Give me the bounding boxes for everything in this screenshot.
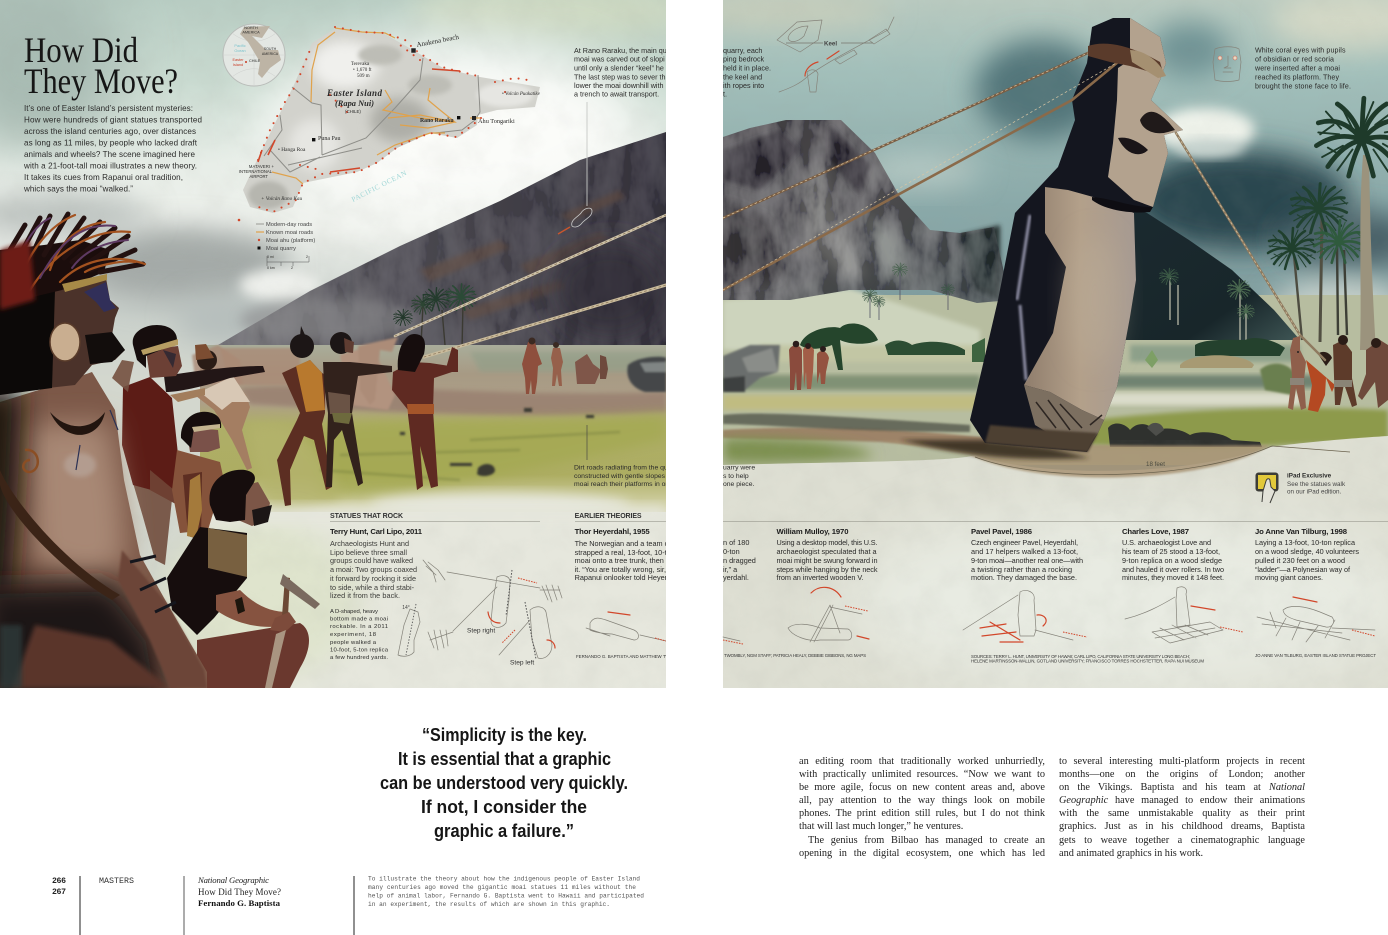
locator globe: SOUTH xyxy=(264,47,277,51)
theory: Charles Love: Charles Love, 1987 xyxy=(1122,527,1189,536)
diagram: rocking moai profile: 14° xyxy=(402,605,410,611)
section: statues that rock: a few hundred yards. xyxy=(330,655,388,661)
map of Easter Island: AIRPORT xyxy=(249,174,268,179)
map of Easter Island: 509 m xyxy=(357,74,370,79)
section: earlier theories, Thor Heyerdahl, left half xyxy=(575,513,671,659)
pull quote: It is essential that a graphic xyxy=(398,748,611,769)
dark mountain xyxy=(1126,212,1298,340)
young woman with tool xyxy=(172,412,226,540)
article text column one xyxy=(799,756,1045,859)
footer: section label xyxy=(99,876,184,935)
footer: credit: National Geographic xyxy=(197,875,269,885)
boulders at left xyxy=(723,345,780,392)
map of Easter Island: Terevaka xyxy=(351,62,370,67)
sky xyxy=(0,0,666,654)
heading: How Did They Move?: How Did xyxy=(24,30,138,70)
footer: section label: MASTERS xyxy=(99,877,134,886)
theory: Pavel Pavel: Pavel Pavel, 1986 xyxy=(971,527,1032,536)
map of Easter Island: Rano Raraku xyxy=(420,118,454,124)
heading: How Did They Move? xyxy=(24,30,178,101)
footer: credit xyxy=(197,875,354,935)
section: statues that rock: a moai: Two groups coaxed xyxy=(330,565,417,574)
map of Easter Island: Puna Pau xyxy=(318,136,340,142)
map of Easter Island: (CHILE) xyxy=(345,109,361,114)
article text column one: opening in the digital ecosystem, one which has led xyxy=(799,848,1045,859)
section: statues that rock: groups could have walked xyxy=(330,556,413,565)
intro paragraph: It takes its cues from Rapanui oral tradition, xyxy=(24,173,183,182)
moai statue xyxy=(970,18,1183,452)
section: statues that rock: rockable. In a 2011 xyxy=(330,624,388,630)
mountain: Rano Raraku xyxy=(218,132,666,345)
footer: credit: Fernando G. Baptista xyxy=(198,898,281,908)
section: statues that rock: bottom made a moai xyxy=(330,616,388,622)
footer: caption: many centuries ago moved the gigantic moai statues 11 miles without the xyxy=(368,884,636,891)
theory: Pavel Pavel: motion. They damaged the base. xyxy=(971,573,1077,582)
footer: caption: To illustrate the theory about how the indigenous people of Easter Island xyxy=(368,876,640,882)
thatched house xyxy=(1180,355,1254,368)
diagram: keel and quarrying steps: Keel xyxy=(824,40,837,48)
left page illustration: moai hauling crew xyxy=(0,0,710,700)
callout: Rano Raraku quarry, left half xyxy=(574,46,667,98)
locator globe: AMERICA xyxy=(242,30,260,34)
section: earlier theories, Thor Heyerdahl, left half: FERNANDO G. BAPTISTA AND MATTHEW TW xyxy=(576,654,671,659)
map of Easter Island: + Volcán Rano Kau xyxy=(261,196,303,202)
callout: Rano Raraku quarry, left half: a trench to await transport. xyxy=(574,90,659,98)
section: statues that rock: STATUES THAT ROCK xyxy=(330,513,403,520)
callout: coral eyes with face icon xyxy=(1213,46,1351,90)
intro paragraph: as long as 11 miles, by people who lacked draft xyxy=(24,138,198,148)
feathers xyxy=(0,240,110,305)
ropes left page xyxy=(395,215,666,357)
callout: Rano Raraku quarry, right half: ith ropes into xyxy=(723,81,764,90)
callout: Rano Raraku quarry, left half: lower the moai downhill with xyxy=(574,81,664,90)
theory: Jo Anne Van Tilburg: moving giant canoes. xyxy=(1255,573,1323,582)
callout: Rano Raraku quarry, right half: quarry, each xyxy=(723,46,762,55)
modern roads xyxy=(264,58,480,172)
pull quote: “Simplicity is the key. xyxy=(422,724,587,745)
right page illustration: the giant moai xyxy=(670,0,1388,690)
callout: iPad exclusive: See the statues walk xyxy=(1287,481,1346,488)
theory: Jo Anne Van Tilburg: Laying a 13-foot, 10-ton replica xyxy=(1255,538,1356,547)
chief in feather headdress xyxy=(0,214,207,700)
article text column one: be more agile, focus on new content areas and, above xyxy=(799,782,1045,793)
callout: dirt roads, left half: moai reach their platforms in one xyxy=(574,481,673,488)
map legend: 2 xyxy=(306,255,308,259)
map markers and labels xyxy=(411,48,416,53)
theory: Pavel Pavel: SOURCES: TERRY L. HUNT, UNIVERSITY OF HAWAII; CARL LIPO, CALIFORNIA STATE UNIVERSITY LONG BEACH; xyxy=(971,654,1190,659)
article text column one: The genius from Bilbao has managed to create an xyxy=(808,835,1045,846)
palm trees on left page xyxy=(393,284,476,350)
theory: Pavel Pavel: and 17 helpers walked a 13-foot, xyxy=(971,547,1078,556)
article text column two: months—one on the origins of London; another xyxy=(1059,769,1305,780)
section: earlier theories, Thor Heyerdahl, left half: it. “You are totally wrong, sir, xyxy=(575,565,666,574)
dirt circle around moai base: 18 feet xyxy=(1146,461,1165,468)
callout: Rano Raraku quarry, right half: the keel and xyxy=(723,72,762,82)
map of Easter Island: Ahu Tongariki xyxy=(478,118,515,125)
section: statues that rock: 10-foot, 5-ton replica xyxy=(330,648,389,654)
locator globe: Pacific xyxy=(234,44,246,48)
theory: Pavel Pavel: 9-ton moai—another real one—with xyxy=(971,556,1083,565)
article text column two xyxy=(1059,756,1305,859)
map of Easter Island: Anakena beach xyxy=(416,33,460,49)
diagram: walking moai step right and step left: Step left xyxy=(510,660,534,666)
distant crowd xyxy=(192,337,398,410)
theory: William Mulloy xyxy=(776,527,878,642)
footer: caption: in an experiment, the results of which are shown in this graphic. xyxy=(368,901,610,908)
theory: Jo Anne Van Tilburg: Jo Anne Van Tilburg, 1998 xyxy=(1255,527,1348,536)
hauling man in dark paint xyxy=(323,332,392,487)
locator globe: NORTH xyxy=(244,26,258,30)
callout: Rano Raraku quarry, left half: At Rano Raraku, the main qu xyxy=(574,46,667,55)
intro paragraph: It’s one of Easter Island’s persistent mysteries: xyxy=(24,104,193,113)
callout: dirt roads, left half: constructed with gentle slopes to xyxy=(574,473,673,480)
theory: William Mulloy: Using a desktop model, this U.S. xyxy=(776,538,878,547)
callout: iPad exclusive: on our iPad edition. xyxy=(1287,488,1342,496)
far figures at right xyxy=(522,338,608,394)
intro paragraph: animals and wheels? The scene imagined here xyxy=(24,150,195,159)
section: earlier theories, Thor Heyerdahl, left half: moai onto a tree trunk, then d xyxy=(575,556,670,565)
theory: Jo Anne Van Tilburg: JO ANNE VAN TILBURG, EASTER ISLAND STATUE PROJECT xyxy=(1255,653,1376,658)
map of Easter Island: • Volcán Puakatike xyxy=(502,92,541,97)
section: earlier theories, Thor Heyerdahl, left half: strapped a real, 13-foot, 10-t xyxy=(575,548,667,557)
theory: Charles Love: U.S. archaeologist Love and xyxy=(1122,538,1211,547)
theory: Jo Anne Van Tilburg: “ladder”—a Polynesian way of xyxy=(1255,565,1351,574)
map legend: Known moai roads xyxy=(266,230,313,236)
section: statues that rock: experiment, 18 xyxy=(330,632,377,638)
theory: William Mulloy: William Mulloy, 1970 xyxy=(776,527,848,536)
theory: Jo Anne Van Tilburg: pulled it 230 feet on a wood xyxy=(1255,556,1345,565)
section: statues that rock xyxy=(330,513,540,661)
map of Easter Island: • Hanga Roa xyxy=(278,147,306,153)
callout: dirt roads, left half xyxy=(574,425,673,488)
map legend: Modern-day roads xyxy=(266,222,312,228)
ground xyxy=(200,345,666,525)
known moai roads xyxy=(272,28,481,184)
footer: page numbers xyxy=(52,876,80,935)
callout: coral eyes with face icon: brought the stone face to life. xyxy=(1255,82,1351,90)
boulders xyxy=(400,357,666,476)
callout: Rano Raraku quarry, left half: until only a slender “keel” he xyxy=(574,64,664,72)
map of Easter Island: MATAVERI + xyxy=(249,164,274,169)
theory: William Mulloy: archaeologist speculated that a xyxy=(776,547,877,556)
crew pulling the right rope xyxy=(1288,335,1388,412)
callout: Rano Raraku quarry, right half: t. xyxy=(723,90,727,98)
diagram: walking moai step right and step left: Step right xyxy=(467,628,495,634)
Thor Heyerdahl text, right half: ir,” a xyxy=(723,565,738,574)
section: statues that rock: Archaeologists Hunt and xyxy=(330,539,409,548)
standing man in cream cloth xyxy=(195,344,252,470)
article text column two: on the Vikings. Baptista and his team at National xyxy=(1059,782,1305,793)
theory: Pavel Pavel: a twisting rather than a rocking xyxy=(971,565,1072,574)
moai ahu dots xyxy=(253,27,528,212)
callout: dirt roads, right half: one piece. xyxy=(723,481,754,488)
footer: credit: How Did They Move? xyxy=(198,887,281,897)
Thor Heyerdahl text, right half: n of 180 xyxy=(723,538,749,547)
statue silhouette xyxy=(970,18,1183,452)
heading: How Did They Move?: They Move? xyxy=(24,61,178,101)
earring xyxy=(50,323,80,361)
map legend: 0 km xyxy=(267,266,275,270)
section: statues that rock: A D-shaped, heavy xyxy=(330,609,378,615)
section: statues that rock: people walked a xyxy=(330,640,377,646)
intro paragraph: which says the moai “walked.” xyxy=(23,184,133,194)
map legend: Moai ahu (platform) xyxy=(266,238,315,244)
divider across earlier theories xyxy=(723,520,1388,522)
pull quote: can be understood very quickly. xyxy=(380,772,628,793)
callout: coral eyes with face icon: White coral eyes with pupils xyxy=(1255,46,1346,54)
theory: Charles Love: and hauled it over rollers. In two xyxy=(1122,565,1224,574)
section: earlier theories, Thor Heyerdahl, left half: Thor Heyerdahl, 1955 xyxy=(575,527,650,536)
map legend: Moai quarry xyxy=(266,246,296,252)
keel outline and callout line on the mountain xyxy=(558,102,592,234)
theory: Charles Love: minutes, they moved it 148 feet. xyxy=(1122,573,1224,582)
Thor Heyerdahl text, right half: n dragged xyxy=(723,556,756,565)
callout: iPad exclusive: iPad Exclusive xyxy=(1287,472,1332,480)
map legend: 2 xyxy=(291,266,293,270)
map of Easter Island: Easter Island xyxy=(326,88,382,98)
face xyxy=(1108,18,1183,207)
footer: caption: help of animal labor, Fernando G. Baptista went to Hawaii and participated xyxy=(368,892,644,900)
pull quote: graphic a failure.” xyxy=(434,820,574,841)
theory: William Mulloy: from an inverted wooden V. xyxy=(776,573,864,582)
article text column one: all, pay attention to the way things look on mobile xyxy=(799,795,1045,806)
distant onlookers xyxy=(789,341,829,390)
theory: Jo Anne Van Tilburg: on a wood sledge, 40 volunteers xyxy=(1255,547,1359,556)
map of Easter Island xyxy=(238,27,541,221)
man pointing xyxy=(112,325,265,565)
section: earlier theories, Thor Heyerdahl, left half: Rapanui onlooker told Heyer xyxy=(575,573,668,582)
map of Easter Island: PACIFIC OCEAN xyxy=(350,169,409,204)
callout: dirt roads, right half: uarry were xyxy=(723,464,755,472)
section: statues that rock: it forward by rocking it side xyxy=(330,574,416,583)
theory: Pavel Pavel: HELENE MARTINSSON-WALLIN, GOTLAND UNIVERSITY; FRANCISCO TORRES HOCHSTETTER, RAPA NUI MUSEUM xyxy=(971,658,1204,664)
pull quote xyxy=(380,724,628,841)
theory: Charles Love: his team of 25 stood a 13-foot, xyxy=(1122,547,1220,556)
hauling man with orange back xyxy=(277,326,332,506)
Thor Heyerdahl text, right half: yerdahl. xyxy=(723,573,749,582)
footer: page numbers: 266 xyxy=(52,877,66,886)
callout: Rano Raraku quarry, right half: held it in place. xyxy=(723,64,771,72)
theory: Charles Love: 9-ton replica on a wood sledge xyxy=(1122,556,1222,565)
Thor Heyerdahl text, right half: TWOMBLY, NGM STAFF; PATRICIA HEALY, DEBBIE GIBBONS, NG MAPS xyxy=(724,653,866,658)
footer: caption xyxy=(368,876,644,908)
article text column two: with the same unmistakable quality as their print xyxy=(1059,808,1305,819)
theory: Charles Love xyxy=(1122,527,1243,643)
theory: Jo Anne Van Tilburg xyxy=(1255,527,1376,658)
locator globe: Easter xyxy=(233,58,244,62)
callout: dirt roads, left half: Dirt roads radiating from the qua xyxy=(574,464,672,472)
locator globe: Island xyxy=(233,63,243,67)
diagram: rocking moai profile xyxy=(398,604,420,656)
big palm trees xyxy=(1268,98,1388,350)
map legend xyxy=(256,222,315,270)
stormy sky xyxy=(723,0,1388,471)
callout: coral eyes with face icon: of obsidian or red scoria xyxy=(1255,56,1334,64)
map of Easter Island: (Rapa Nui) xyxy=(335,99,374,108)
locator globe xyxy=(223,24,285,86)
callout: Rano Raraku quarry, right half: ping bedrock xyxy=(723,54,765,64)
body xyxy=(0,372,207,688)
article text column two: gets to weave together a cinematographic language xyxy=(1059,835,1305,846)
section: statues that rock: lized it from the back. xyxy=(330,591,400,600)
road, stones and grass xyxy=(723,408,1388,463)
intro paragraph: with a 21-foot-tall moai illustrates a new theory. xyxy=(23,162,197,170)
article text column two: Geographic have managed to endow their animations xyxy=(1059,795,1305,806)
seated man with axe xyxy=(167,470,320,688)
hauling man with long hair xyxy=(392,334,458,490)
map of Easter Island: • 1,670 ft xyxy=(353,68,372,73)
section: statues that rock: Terry Hunt, Carl Lipo, 2011 xyxy=(330,527,423,536)
section: statues that rock: to side, while a third stabi- xyxy=(330,583,415,592)
locator globe: Ocean xyxy=(234,49,246,53)
article text column two: to several interesting multi-platform projects in recent xyxy=(1059,756,1305,767)
article text column one: an editing room that traditionally worked unhurriedly, xyxy=(799,756,1045,767)
intro paragraph xyxy=(23,104,202,194)
valley ground xyxy=(723,288,1388,465)
theory: Pavel Pavel: Czech engineer Pavel, Heyerdahl, xyxy=(971,538,1078,547)
map legend: 0 mi xyxy=(267,255,274,259)
callout: dirt roads, right half: s to help xyxy=(723,473,749,480)
lit front of statue xyxy=(1024,187,1136,420)
article text column two: graphics. Just as in his childhood dreams, Baptista xyxy=(1059,821,1305,832)
theory: William Mulloy: moai might be swung forward in xyxy=(776,556,878,565)
locator globe: AMERICA xyxy=(262,52,279,56)
article text column one: that will last much longer,” he ventures. xyxy=(799,821,963,832)
callout: Rano Raraku quarry, right half xyxy=(723,46,771,98)
intro paragraph: across the island centuries ago, over distances xyxy=(24,127,196,136)
article text column one: with practically unlimited resources. “Now we want to xyxy=(799,769,1045,780)
callout: Rano Raraku quarry, left half: moai was carved out of slopi xyxy=(574,54,665,64)
diagram: keel and quarrying steps xyxy=(777,17,894,92)
strip of paint at left edge xyxy=(0,625,22,688)
parchment panel xyxy=(168,500,666,688)
footer: page numbers: 267 xyxy=(52,888,66,897)
pull quote: If not, I consider the xyxy=(421,796,587,817)
section: earlier theories, Thor Heyerdahl, left half: The Norwegian and a team o xyxy=(575,539,669,548)
locator globe: CHILE xyxy=(249,59,261,63)
article text column one: phones. The print edition still rules, but I do not think xyxy=(799,808,1045,819)
callout: Rano Raraku quarry, left half: The last step was to sever th xyxy=(574,72,665,82)
intro paragraph: How were hundreds of giant statues transported xyxy=(24,116,202,124)
arm highlight xyxy=(1017,215,1030,380)
dirt circle around moai base xyxy=(880,440,1350,478)
theory: Pavel Pavel xyxy=(963,527,1204,664)
rock mountain xyxy=(723,118,1013,308)
section: statues that rock: Lipo believe three small xyxy=(330,548,407,557)
trees and distant palms xyxy=(800,263,1295,395)
section: earlier theories, Thor Heyerdahl, left half: EARLIER THEORIES xyxy=(575,513,642,520)
article text column two: and animated graphics in his work. xyxy=(1059,848,1203,859)
map of Easter Island: INTERNATIONAL xyxy=(239,169,273,174)
island landmass xyxy=(243,27,540,213)
Thor Heyerdahl text, right half xyxy=(723,538,866,658)
head and beard xyxy=(48,278,125,388)
ropes right page xyxy=(723,44,1325,360)
parchment panel right xyxy=(723,436,1388,690)
callout: iPad exclusive xyxy=(1256,472,1346,503)
callout: dirt roads, right half xyxy=(723,464,755,488)
callout: coral eyes with face icon: were inserted after a moai xyxy=(1254,64,1340,72)
theory: William Mulloy: steps while hanging by the neck xyxy=(776,565,878,574)
diagram: walking moai step right and step left xyxy=(423,560,562,666)
callout: coral eyes with face icon: reached its platform. They xyxy=(1255,74,1339,82)
Thor Heyerdahl text, right half: 0-ton xyxy=(723,547,740,556)
